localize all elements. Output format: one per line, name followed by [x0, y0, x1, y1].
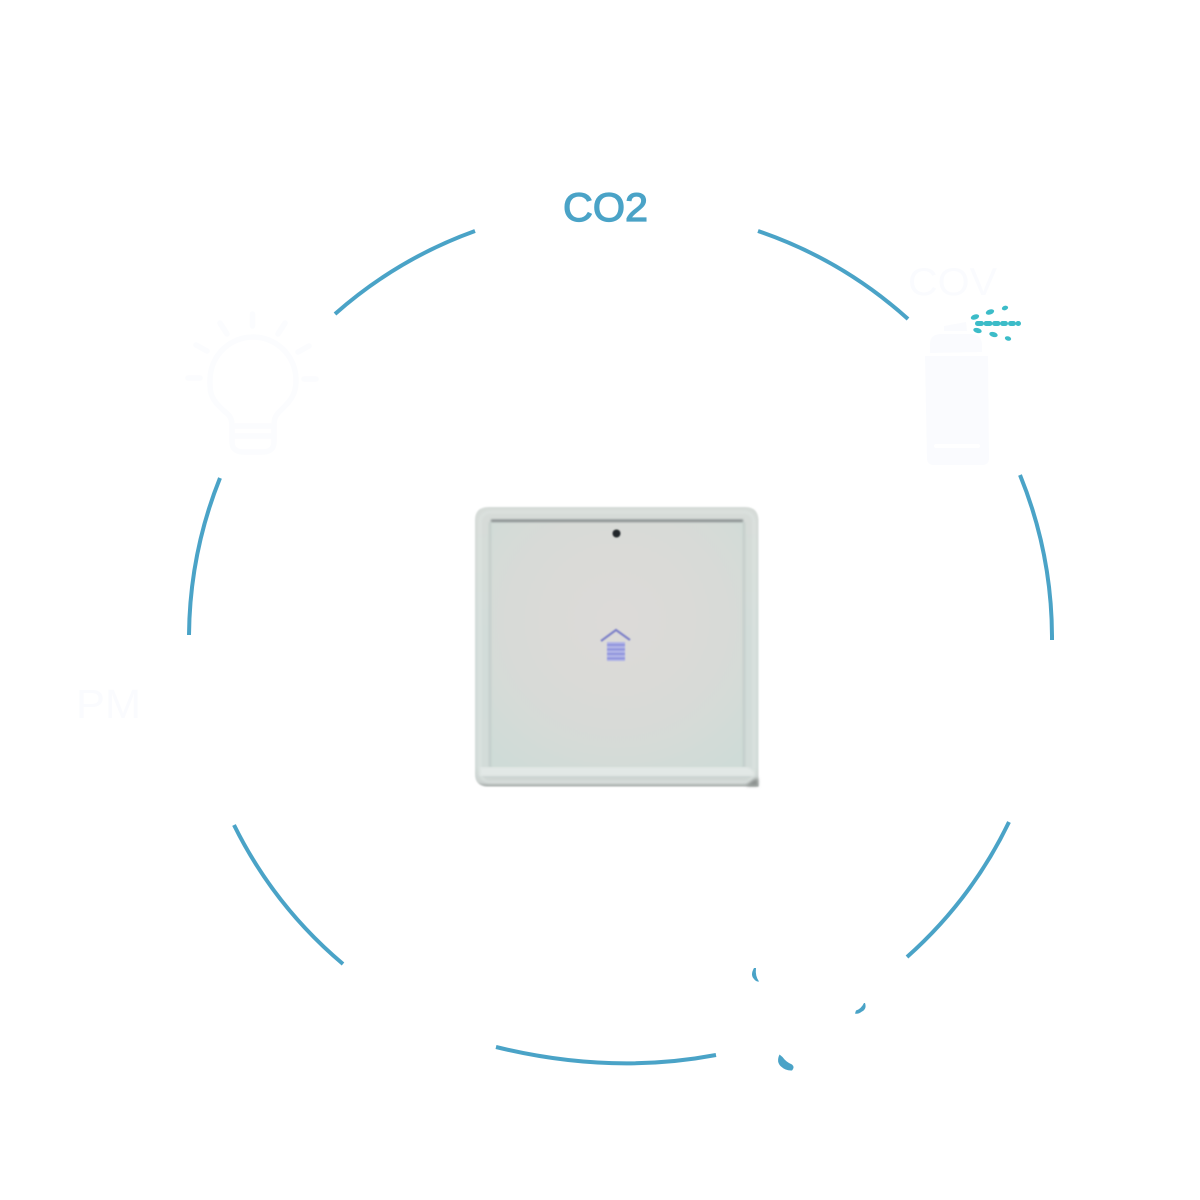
ring of arc segments [189, 231, 1052, 1063]
icon: light bulb [188, 314, 316, 452]
house roof [601, 630, 630, 641]
heading: CO2: CO2 [563, 186, 648, 230]
device bottom corner shadow [746, 778, 758, 786]
house body [607, 642, 625, 661]
device house logo [601, 630, 630, 661]
device side lines [490, 522, 744, 768]
spray can shoulder [930, 334, 982, 353]
spray can body [925, 356, 989, 465]
house stripes [607, 644, 625, 659]
device casing [475, 507, 758, 786]
spray can nozzle [944, 322, 967, 331]
heading: PM: PM [76, 681, 141, 727]
device top shadow line [491, 520, 743, 522]
spray droplets [970, 305, 1021, 341]
device bottom rim [480, 767, 754, 776]
heading: COV: COV [908, 261, 997, 304]
device sensor hole [612, 530, 620, 538]
device casing highlight [480, 512, 754, 782]
device face [490, 521, 744, 768]
spray can label slit [934, 444, 980, 448]
icon: droplet fragments [752, 968, 866, 1071]
icon: spray can [925, 305, 1021, 465]
device: wall sensor [475, 507, 758, 786]
